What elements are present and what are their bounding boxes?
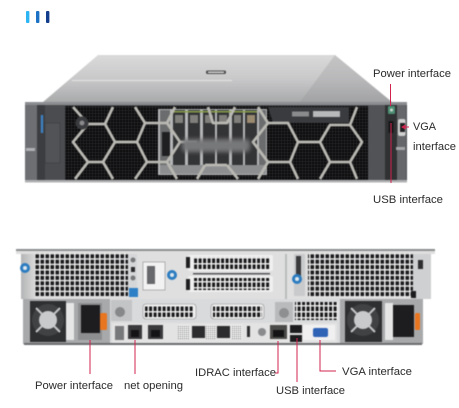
label: rear VGA interface: VGA interface (342, 366, 412, 378)
label: rear power interface: Power interface (35, 380, 113, 392)
blue thumbscrews (20, 263, 302, 284)
rear upper chassis (16, 249, 435, 299)
label: front USB interface: USB interface (373, 194, 443, 206)
rear annotation lines (90, 338, 336, 382)
label: front VGA interface: interface (413, 141, 456, 153)
icon: three blue bars (26, 11, 49, 23)
label: net opening: net opening (124, 380, 183, 392)
hexagon grille (73, 107, 362, 179)
rear server (16, 249, 435, 345)
blurred center patch (182, 139, 250, 152)
front annotation lines (390, 84, 409, 183)
front ports (388, 106, 406, 136)
right power supply (345, 301, 420, 342)
left power supply (30, 301, 107, 342)
bezel lock (76, 116, 88, 130)
server top cover (43, 55, 392, 102)
media panel (268, 107, 349, 123)
front panel (25, 102, 407, 182)
label: IDRAC interface: IDRAC interface (195, 367, 276, 379)
drive bays (158, 109, 267, 175)
label: rear USB interface: USB interface (276, 385, 345, 397)
front server (25, 55, 407, 182)
hexagonal bezel mesh (65, 106, 368, 180)
label: front VGA interface (413, 121, 456, 153)
rear lower chassis (23, 299, 423, 345)
rear ports (112, 323, 337, 343)
label: front VGA interface: VGA (413, 121, 437, 133)
label: front power interface: Power interface (373, 68, 451, 80)
